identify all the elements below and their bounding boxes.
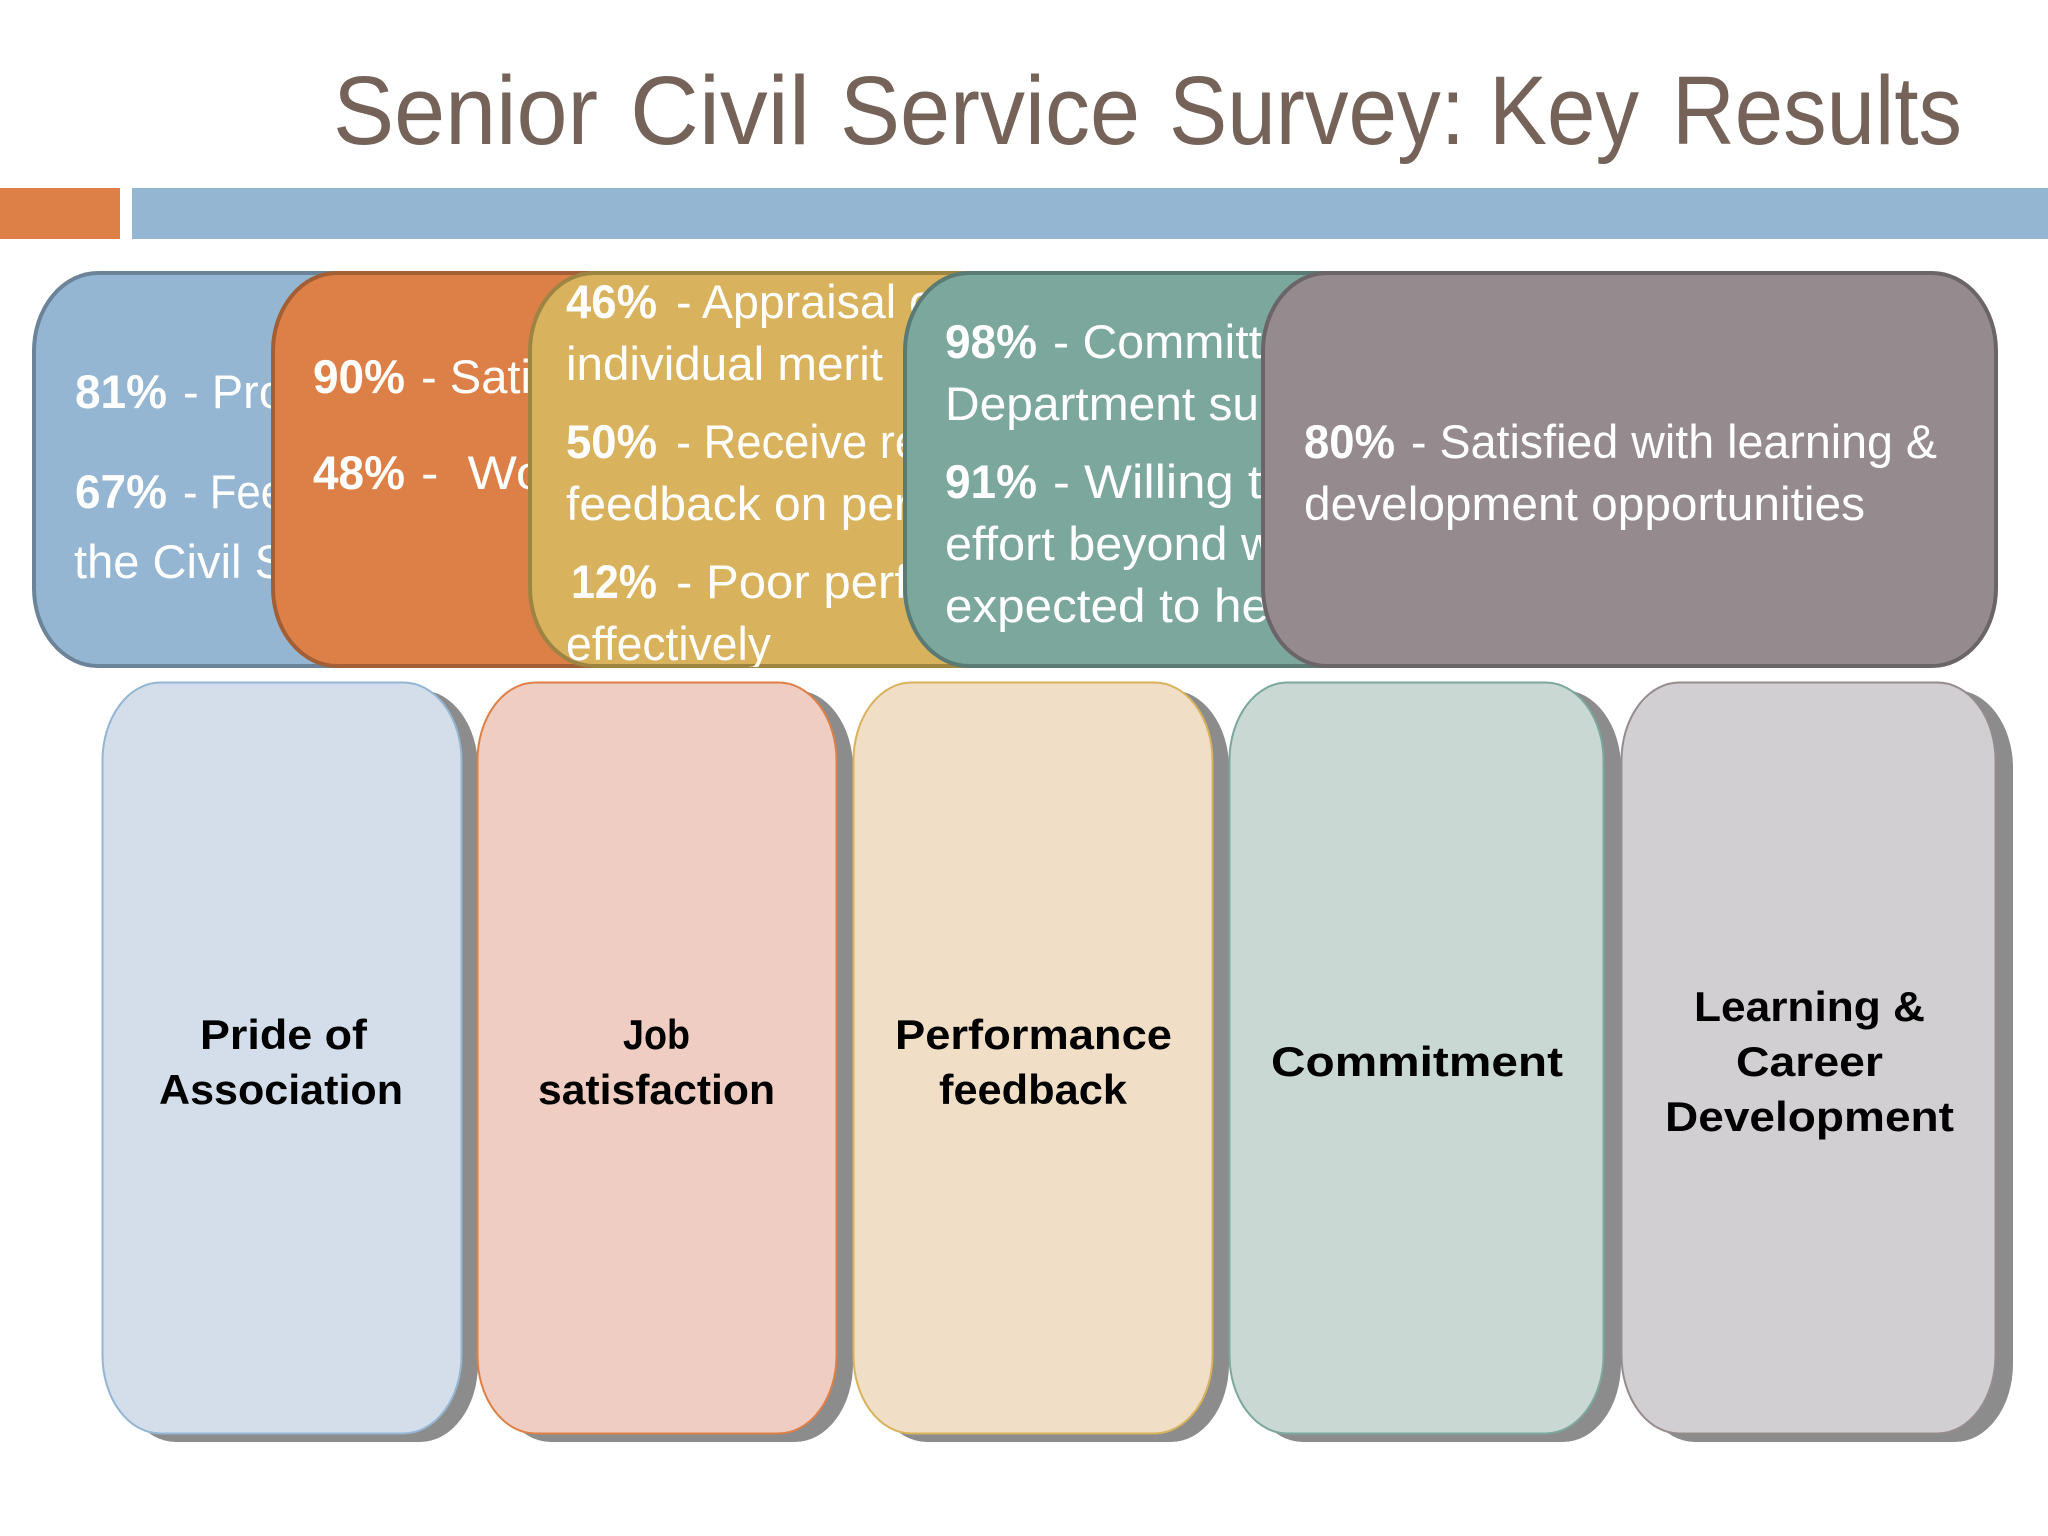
card label: satisfaction [538, 1066, 775, 1113]
title: Civil [630, 56, 810, 165]
title [333, 56, 1962, 165]
panel: job satisfaction results [273, 273, 673, 666]
result: 67% [74, 465, 286, 588]
result: 91% [945, 455, 1277, 632]
category card: performance feedback [854, 682, 1229, 1442]
result: 98%: - Committ [1053, 315, 1262, 368]
result: 50%: 50% [566, 415, 657, 468]
card label [159, 1011, 403, 1113]
result: 46%: individual merit [566, 337, 883, 390]
card shadow [493, 690, 853, 1442]
card label: Performance [895, 1011, 1172, 1058]
card label: feedback [939, 1066, 1128, 1113]
result: 48% [313, 446, 545, 499]
accent bar: blue [132, 188, 2048, 239]
panel: performance feedback results [528, 271, 968, 668]
panel background: teal [905, 273, 1405, 666]
result: 12%: 12% [571, 555, 657, 608]
result: 90% [313, 350, 531, 403]
result: 80%: - Satisfied with learning & [1411, 415, 1937, 468]
category card: job satisfaction [478, 682, 853, 1442]
card shadow [1637, 690, 2013, 1442]
result: 46% [566, 275, 935, 390]
panel background: gold [530, 273, 1030, 666]
result: 80%: development opportunities [1304, 477, 1865, 530]
result: 80%: 80% [1304, 415, 1395, 468]
result: 46%: - Appraisal o [676, 275, 935, 328]
card label: Commitment [1271, 1038, 1563, 1085]
card body [854, 682, 1212, 1434]
card label [895, 1011, 1172, 1113]
result: 50%: feedback on per [566, 477, 910, 530]
result: 12%: effectively [566, 617, 771, 670]
result: 48%: 48% [313, 446, 405, 499]
card body [1622, 682, 1996, 1434]
card body [1230, 682, 1604, 1434]
title: Senior [333, 56, 598, 165]
accent bar: orange [0, 188, 120, 239]
title: Results [1672, 56, 1962, 165]
category card: learning and career development [1622, 682, 2013, 1442]
result: 50%: - Receive re [676, 415, 920, 468]
result: 81%: 81% [75, 365, 167, 418]
result: 90%: - Sati [421, 350, 531, 403]
result: 91%: 91% [945, 455, 1037, 508]
card label: Learning & [1694, 983, 1925, 1030]
panel background: grey [1263, 273, 1996, 666]
result: 50% [566, 415, 920, 530]
card label [538, 1011, 775, 1113]
card body [478, 682, 836, 1434]
card label: Pride of [200, 1011, 368, 1058]
result: 12%: - Poor perf [676, 555, 909, 608]
panel: learning and development results [1263, 273, 1996, 666]
card label: Development [1665, 1093, 1954, 1140]
result: 91%: - Willing t [1053, 455, 1262, 508]
panel: pride of association results [34, 273, 434, 666]
result: 67%: the Civil S [74, 535, 286, 588]
result: 91%: effort beyond w [945, 517, 1277, 570]
result: 91%: expected to he [945, 579, 1269, 632]
result: 67%: - Fee [183, 465, 285, 518]
result: 48%: - Wo [421, 446, 545, 499]
panel background: orange [273, 273, 673, 666]
result: 98% [945, 315, 1283, 430]
category card: commitment [1230, 682, 1621, 1442]
result: 98%: Department suc [945, 377, 1283, 430]
panel: commitment results [905, 273, 1405, 666]
category card: pride of association [102, 682, 478, 1442]
result: 81%: - Pro [183, 365, 285, 418]
panel background: blue [34, 273, 434, 666]
result: 90%: 90% [313, 350, 405, 403]
result: 67%: 67% [75, 465, 167, 518]
title: Service [840, 56, 1140, 165]
card label: Job [623, 1011, 690, 1058]
card body [102, 682, 462, 1434]
result: 12% [568, 564, 904, 667]
card label: Career [1736, 1038, 1883, 1085]
result: 81% [75, 365, 285, 418]
title: Key [1489, 56, 1639, 165]
result: 98%: 98% [945, 315, 1037, 368]
card label: Association [159, 1066, 403, 1113]
result: 80% [1304, 415, 1937, 530]
card shadow [1245, 690, 1621, 1442]
card label [1665, 983, 1954, 1140]
title: Survey: [1169, 56, 1465, 165]
card shadow [869, 690, 1229, 1442]
result: 46%: 46% [566, 275, 657, 328]
card shadow [118, 690, 478, 1442]
